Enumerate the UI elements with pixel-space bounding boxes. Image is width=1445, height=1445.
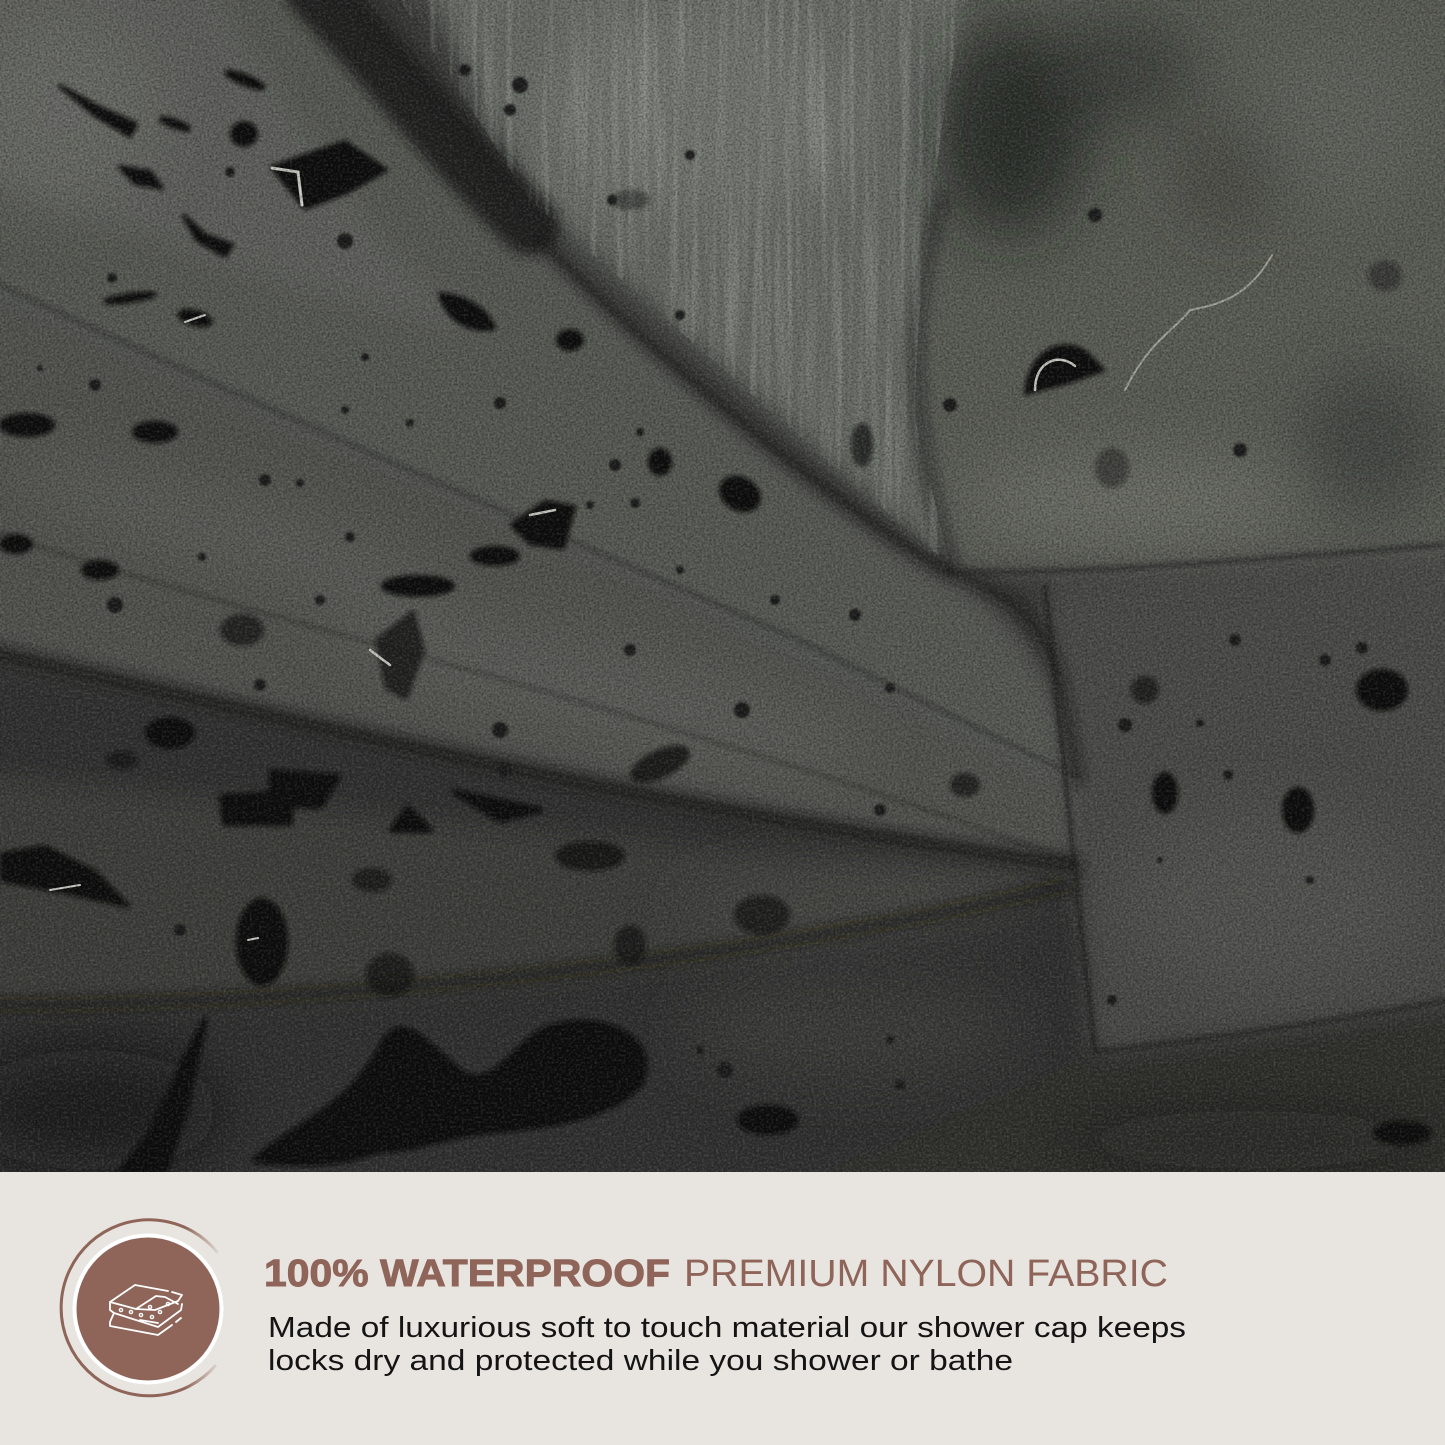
panel: caption [0,1172,1445,1445]
heading: PREMIUM NYLON FABRIC [684,1253,1168,1295]
body text [268,1312,1186,1377]
outer fading ring [61,1220,218,1396]
white ring [72,1234,224,1384]
droplet glints [50,168,1272,940]
icon: layered fabric badge [61,1220,224,1396]
small water beads [37,64,1368,1090]
water droplets [1,69,1429,1143]
fabric layers glyph [110,1285,182,1335]
water pooled on fabric [120,772,645,1172]
vertical woven streaks on the upper panel [402,0,965,563]
body text: Made of luxurious soft to touch material our shower cap keeps [268,1312,1186,1344]
brown disc [76,1238,220,1380]
heading: 100% WATERPROOF [264,1253,670,1295]
body text: locks dry and protected while you shower or bathe [268,1345,1013,1377]
dark creases between folds [0,0,1078,1005]
